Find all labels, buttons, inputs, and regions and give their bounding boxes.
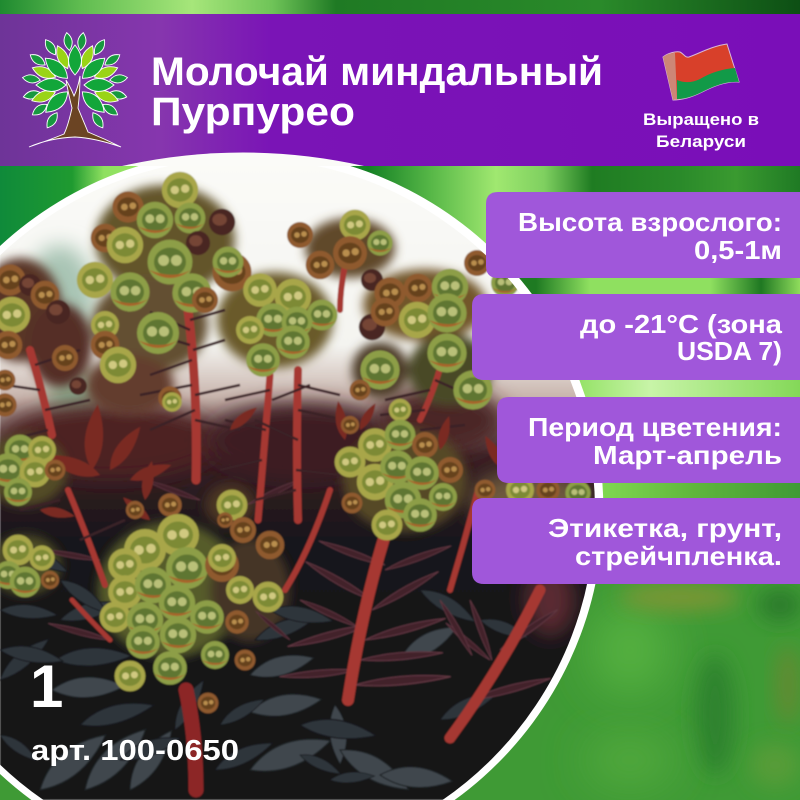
title: Молочай миндальный <box>151 50 603 94</box>
header banner <box>0 14 800 166</box>
flower cluster: lower big <box>100 514 284 713</box>
icon: Belarus flag <box>663 44 739 100</box>
cluster underlay <box>0 185 492 658</box>
text: grown in Belarus <box>643 110 759 151</box>
panel: flowering period: Период цветения: <box>528 412 782 442</box>
tone blotches <box>0 245 590 636</box>
flower cluster: centre big <box>126 420 591 540</box>
panel: hardiness: USDA 7) <box>677 336 782 366</box>
photo: white circle with plant <box>0 150 603 800</box>
text: grown in Belarus: Выращено в <box>643 110 759 129</box>
panel: adult height: 0,5-1м <box>694 235 782 265</box>
panel: flowering period <box>497 397 800 483</box>
panel: package contents: Этикетка, грунт, <box>548 513 782 543</box>
red-brown leaves <box>39 400 509 524</box>
article number: арт. 100-0650 <box>31 735 239 767</box>
panel: adult height <box>486 192 800 278</box>
flower clusters: upper right <box>341 250 519 434</box>
text: grown in Belarus: Беларуси <box>656 132 746 151</box>
panel: flowering period: Март-апрель <box>593 440 782 470</box>
panel: package contents <box>472 498 800 584</box>
panel: adult height: Высота взрослого: <box>518 207 782 237</box>
icon: tree logo <box>22 32 128 147</box>
gray and dark leaves <box>0 478 559 798</box>
panel: hardiness <box>472 294 800 380</box>
number 1: 1 <box>30 653 63 720</box>
thin branches <box>5 310 480 540</box>
flower clusters: upper centre <box>236 210 393 377</box>
title: Пурпурео <box>151 90 355 134</box>
panel: hardiness: до -21°С (зона <box>580 309 783 339</box>
title <box>151 50 603 134</box>
flower clusters: left edge <box>0 264 87 597</box>
red stems <box>30 265 540 790</box>
flower clusters: upper left <box>77 172 252 412</box>
panel: package contents: стрейчпленка. <box>575 541 782 571</box>
